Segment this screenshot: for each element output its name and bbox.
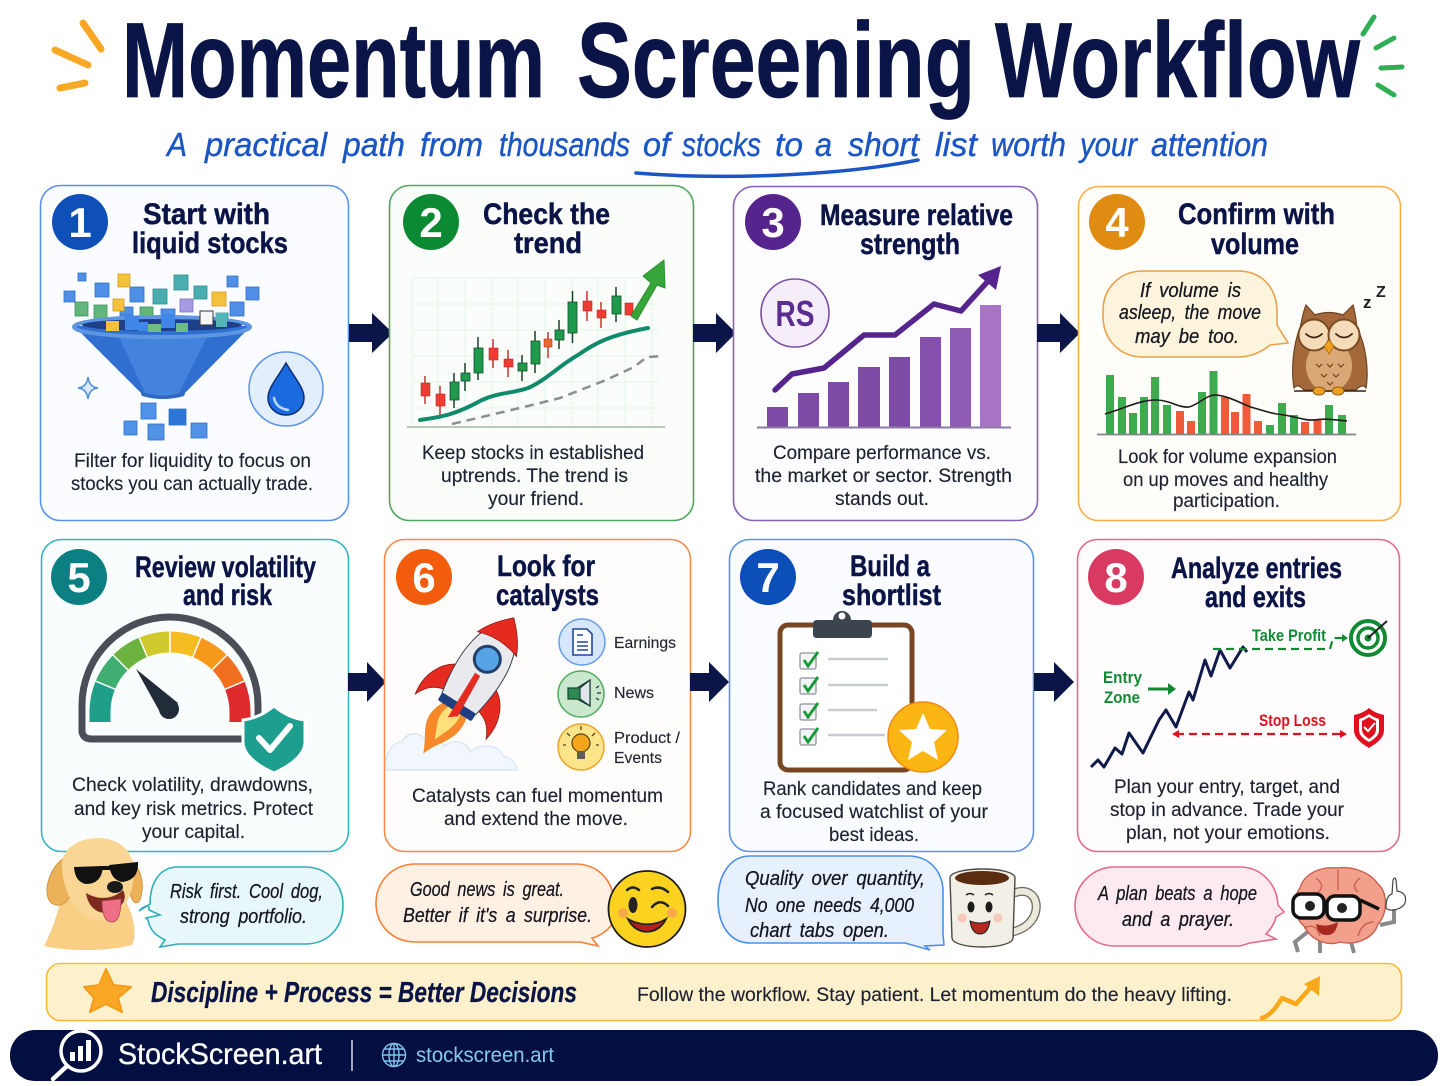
- icon: water drop: [249, 352, 323, 426]
- heading: trend: [514, 227, 582, 260]
- description: your capital.: [142, 821, 245, 843]
- icon: orange burst rays: [55, 23, 101, 88]
- description: on up moves and healthy: [1123, 469, 1328, 491]
- candlestick chart: [407, 260, 665, 428]
- speech bubble: mug: [718, 856, 944, 950]
- volume bar chart: [1097, 371, 1356, 434]
- heading: [1171, 552, 1342, 614]
- subtitle: worth: [991, 126, 1066, 163]
- description: [755, 442, 1012, 510]
- heading: volume: [1211, 228, 1299, 261]
- icon: funnel with stock squares: [64, 273, 259, 440]
- heading: [842, 550, 941, 612]
- icon: green burst rays: [1363, 17, 1402, 95]
- number badge 5: [51, 549, 107, 605]
- card frame: [1078, 186, 1400, 520]
- panel: step 2 trend: [390, 186, 694, 520]
- subtitle: a: [815, 126, 832, 163]
- speech bubble: brain: A plan beats a hope: [1097, 883, 1257, 905]
- description: plan, not your emotions.: [1126, 822, 1330, 844]
- subtitle: to: [775, 126, 803, 163]
- heading: Review volatility: [135, 551, 316, 584]
- description: Rank candidates and keep: [763, 778, 982, 800]
- label: entry zone: [1103, 668, 1142, 707]
- description: participation.: [1173, 490, 1280, 512]
- number badge 7: [740, 549, 796, 605]
- description: and extend the move.: [444, 808, 628, 830]
- arrow: step 1 to 2: [349, 313, 393, 353]
- subtitle: of: [643, 126, 674, 163]
- icon: sleep letters: [1363, 284, 1386, 312]
- label: Product /: [614, 730, 681, 747]
- icon: clipboard checklist: [780, 611, 912, 770]
- icon: sleeping owl: [1293, 305, 1367, 395]
- icon: gold star badge: [888, 702, 958, 772]
- icon: risk gauge: [82, 617, 305, 773]
- mascot: golden retriever with sunglasses: [44, 838, 142, 950]
- icon: globe: [382, 1044, 406, 1066]
- arrow: step 5 to 6: [348, 662, 386, 702]
- callout banner: [46, 964, 1402, 1020]
- speech bubble: emoji: [376, 864, 614, 946]
- title: [122, 0, 1361, 120]
- number badge 8: [1088, 549, 1144, 605]
- panel: step 7 shortlist: [730, 540, 1034, 852]
- icon: clouds: [386, 734, 517, 770]
- speech bubble: owl: asleep, the move: [1119, 302, 1261, 324]
- heading: [1178, 198, 1335, 261]
- description: a focused watchlist of your: [760, 801, 988, 823]
- description: Catalysts can fuel momentum: [412, 785, 663, 807]
- panel: step 8 entries and exits: [1078, 540, 1400, 852]
- label: take profit: Take Profit: [1252, 626, 1326, 645]
- number badge 6: 6: [412, 554, 436, 601]
- number badge 3: [745, 194, 801, 250]
- speech bubble: mug: Quality over quantity,: [745, 868, 925, 890]
- mascot: coffee mug: [950, 869, 1036, 947]
- card frame: [1078, 540, 1400, 852]
- icon: target: [1351, 621, 1387, 655]
- speech bubble: emoji: Good news is great.: [410, 879, 564, 901]
- description: Plan your entry, target, and: [1114, 776, 1340, 798]
- card frame: [730, 540, 1034, 852]
- icon: sparkle: [78, 377, 98, 399]
- heading: Confirm with: [1178, 198, 1335, 231]
- heading: Build a: [850, 550, 930, 583]
- banner background: [46, 964, 1402, 1020]
- subtitle: short: [848, 126, 921, 163]
- subtitle: path: [342, 126, 405, 163]
- number badge 3: 3: [761, 199, 785, 246]
- label: stop loss: Stop Loss: [1259, 711, 1326, 730]
- label: Earnings: [614, 635, 676, 652]
- label: entry zone: Zone: [1104, 688, 1140, 707]
- title: Momentum: [122, 0, 545, 120]
- label: News: [614, 685, 654, 702]
- panel: step 1 liquid stocks: [40, 186, 348, 520]
- arrow: step 2 to 3: [693, 313, 736, 353]
- icon: rising arrow: [1262, 976, 1320, 1018]
- speech bubble: dog: [139, 867, 343, 947]
- description: uptrends. The trend is: [441, 465, 628, 487]
- heading: and exits: [1205, 581, 1306, 614]
- heading: [132, 198, 288, 260]
- icon: earnings: [559, 619, 605, 665]
- card frame: [734, 186, 1038, 520]
- description: Compare performance vs.: [773, 442, 991, 464]
- icon: red shield: [1354, 708, 1384, 748]
- heading: Check the: [483, 198, 610, 231]
- description: [412, 785, 663, 830]
- card frame: [40, 186, 348, 520]
- description: [72, 774, 314, 843]
- arrow: step 6 to 7: [690, 662, 729, 702]
- heading: liquid stocks: [132, 227, 288, 260]
- speech bubble: owl: If volume is: [1140, 280, 1241, 302]
- footer background: [10, 1030, 1438, 1081]
- header: [55, 0, 1402, 176]
- description: the market or sector. Strength: [755, 465, 1012, 487]
- subtitle: attention: [1151, 126, 1268, 163]
- divider: [351, 1040, 353, 1071]
- heading: and risk: [183, 579, 272, 612]
- icon: rocket: [390, 595, 550, 778]
- icon: sleep letters: Z: [1376, 284, 1386, 301]
- description: Check volatility, drawdowns,: [72, 774, 313, 796]
- number badge 1: 1: [68, 199, 92, 246]
- description: stocks you can actually trade.: [71, 473, 313, 495]
- speech bubble: mug: chart tabs open.: [750, 920, 889, 942]
- description: and key risk metrics. Protect: [74, 798, 314, 820]
- brand name: StockScreen.art: [118, 1038, 323, 1071]
- speech bubble: brain: and a prayer.: [1122, 909, 1234, 931]
- heading: Start with: [143, 198, 270, 231]
- subtitle: stocks: [682, 126, 761, 163]
- description: stands out.: [835, 488, 929, 510]
- subtitle: thousands: [499, 126, 630, 163]
- description: [760, 778, 988, 846]
- heading: catalysts: [496, 579, 599, 612]
- heading: [820, 199, 1013, 261]
- label: [614, 730, 681, 767]
- heading: Look for: [497, 550, 595, 583]
- number badge 2: [403, 194, 459, 250]
- badge: RS: [761, 279, 829, 347]
- description: best ideas.: [829, 824, 919, 846]
- card frame: [42, 540, 348, 852]
- description: [422, 442, 644, 510]
- subtitle: your: [1078, 126, 1139, 163]
- number badge 6: [396, 549, 452, 605]
- number badge 4: [1089, 194, 1145, 250]
- speech bubble: mug: No one needs 4,000: [745, 895, 914, 917]
- panel: step 4 volume: [1078, 186, 1400, 520]
- subtitle: from: [420, 126, 483, 163]
- badge: RS: RS: [776, 293, 814, 334]
- subtitle underline: [636, 160, 918, 176]
- heading: strength: [860, 228, 960, 261]
- description: Look for volume expansion: [1118, 446, 1337, 468]
- website: stockscreen.art: [416, 1044, 554, 1067]
- description: [1118, 446, 1337, 512]
- speech bubble: emoji: Better if it's a surprise.: [403, 905, 592, 927]
- label: Events: [614, 750, 662, 767]
- speech bubble: brain: [1075, 867, 1284, 946]
- speech bubble: owl: may be too.: [1135, 326, 1239, 348]
- icon: product light bulb: [558, 724, 604, 770]
- icon: star: [84, 969, 131, 1012]
- mascot: brain with glasses: [1293, 868, 1406, 953]
- card frame: [390, 186, 694, 520]
- speech bubble: dog: strong portfolio.: [180, 906, 307, 928]
- panel: step 6 catalysts: [384, 540, 690, 852]
- heading: [483, 198, 610, 260]
- description: [71, 450, 313, 495]
- card frame: [384, 540, 690, 852]
- speech bubble: owl: [1103, 271, 1288, 357]
- bar chart: [757, 266, 1011, 428]
- icon: sleep letters: z: [1363, 293, 1372, 312]
- heading: Analyze entries: [1171, 552, 1342, 585]
- footer bar: [10, 1030, 1438, 1081]
- panel: step 5 volatility and risk: [42, 540, 348, 852]
- banner message: Follow the workflow. Stay patient. Let momentum do the heavy lifting.: [637, 984, 1232, 1006]
- panel: step 3 relative strength: [734, 186, 1038, 520]
- number badge 7: 7: [756, 554, 780, 601]
- icon: news megaphone: [558, 671, 604, 717]
- description: [1110, 776, 1344, 844]
- price chart with trade levels: [1091, 634, 1348, 767]
- icon: magnifier logo: [53, 1031, 101, 1079]
- heading: [496, 550, 599, 612]
- description: stop in advance. Trade your: [1110, 799, 1344, 821]
- title: Screening: [577, 0, 975, 120]
- subtitle: practical: [204, 126, 329, 163]
- arrow: step 3 to 4: [1037, 313, 1080, 353]
- number badge 2: 2: [419, 199, 443, 246]
- heading: Measure relative: [820, 199, 1013, 232]
- number badge 1: [52, 194, 108, 250]
- description: your friend.: [488, 488, 584, 510]
- description: Filter for liquidity to focus on: [74, 450, 311, 472]
- heading: [135, 551, 316, 612]
- number badge 4: 4: [1105, 199, 1129, 246]
- subtitle: [165, 126, 1268, 163]
- slogan: Discipline + Process = Better Decisions: [151, 977, 577, 1009]
- mascot: winking emoji: [608, 871, 686, 947]
- number badge 5: 5: [67, 554, 91, 601]
- heading: shortlist: [842, 579, 941, 612]
- speech bubble: dog: Risk first. Cool dog,: [170, 881, 323, 903]
- number badge 8: 8: [1104, 554, 1128, 601]
- description: Keep stocks in established: [422, 442, 644, 464]
- arrow: step 7 to 8: [1034, 662, 1074, 702]
- label: entry zone: Entry: [1103, 668, 1142, 687]
- subtitle: A: [165, 126, 187, 163]
- subtitle: list: [935, 126, 979, 163]
